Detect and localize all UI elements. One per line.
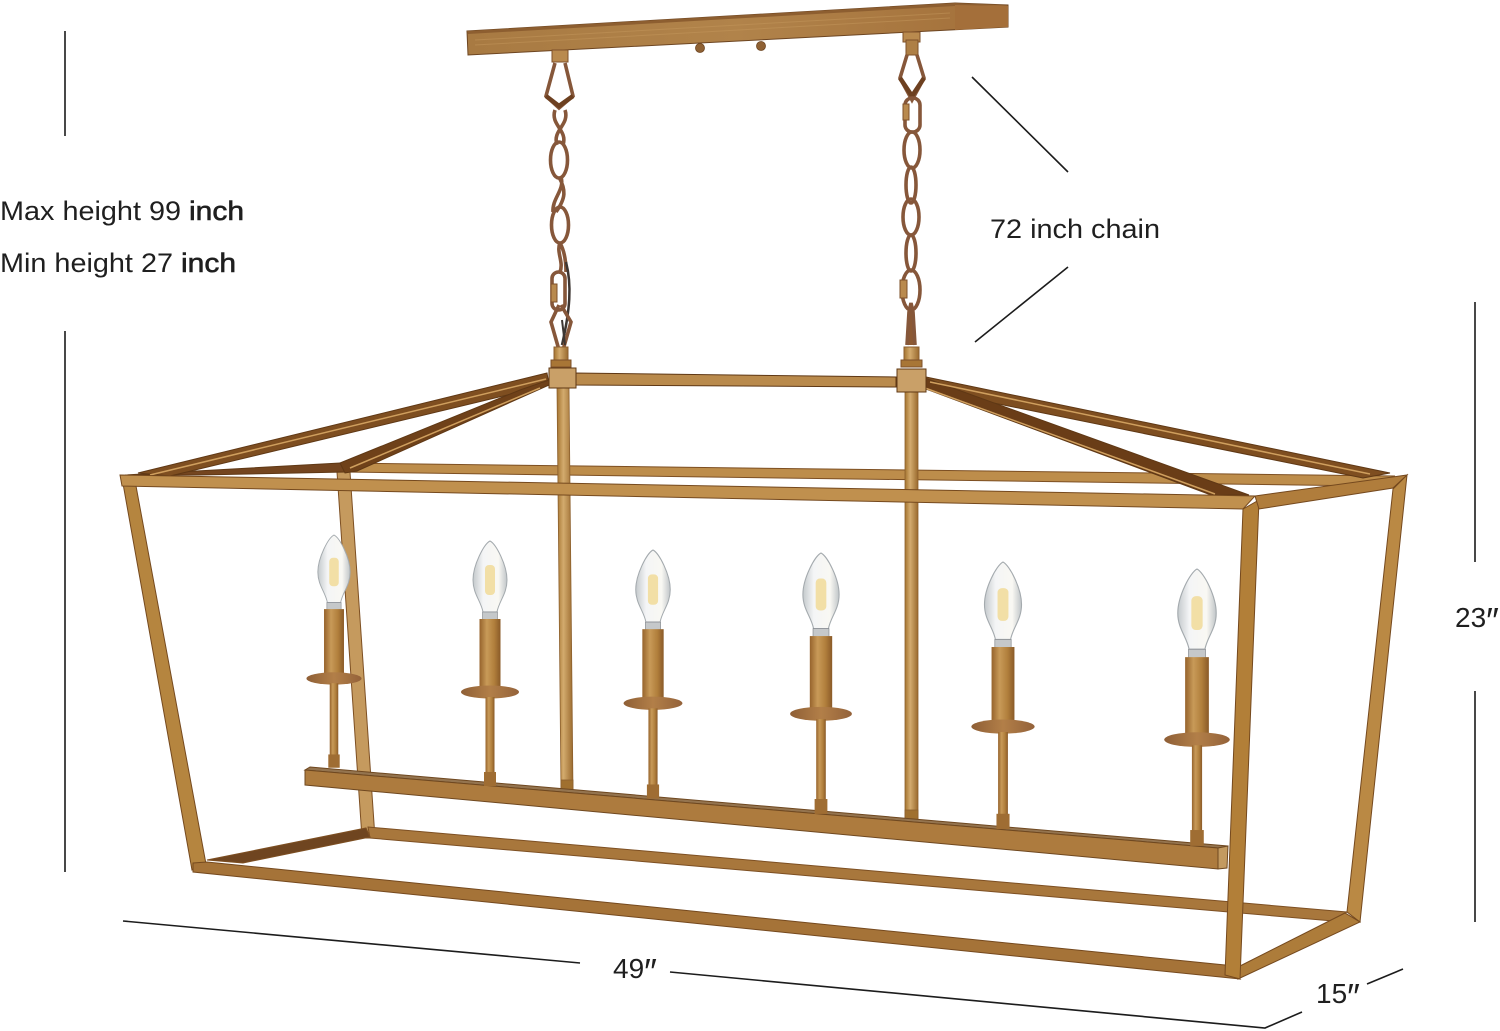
near left post bbox=[122, 478, 206, 870]
front top bar bbox=[120, 475, 1255, 509]
fixture length label: ″ bbox=[644, 951, 657, 992]
max height text: inch bbox=[189, 196, 244, 226]
candle bulb 2 bbox=[461, 541, 519, 786]
back top bar bbox=[340, 463, 1395, 486]
fixture length label: 49 bbox=[613, 953, 644, 984]
fixture height label: ″ bbox=[1486, 600, 1499, 641]
left hub bbox=[549, 368, 576, 388]
right short rafter bbox=[918, 378, 1249, 495]
left long rafter bbox=[138, 373, 549, 476]
far right post bbox=[1347, 475, 1407, 922]
right top side bar bbox=[1255, 475, 1407, 509]
candle bulb 4 bbox=[790, 553, 852, 814]
hub connecting bar bbox=[574, 373, 896, 387]
lantern roof bbox=[125, 368, 1390, 495]
back bottom bar bbox=[368, 827, 1347, 921]
left bottom side bar bbox=[207, 828, 370, 863]
canopy knobs bbox=[696, 42, 766, 52]
right hub bbox=[897, 369, 926, 392]
left short rafter bbox=[340, 380, 549, 473]
candle bulb 1 bbox=[306, 535, 362, 768]
lantern back frame bbox=[207, 463, 1395, 921]
candle bulb 3 bbox=[624, 550, 682, 799]
far left post bbox=[337, 472, 375, 838]
max height text: Max height 99 bbox=[0, 196, 181, 226]
fixture height label: 23 bbox=[1455, 602, 1486, 633]
front bottom bar bbox=[193, 862, 1240, 979]
right long rafter bbox=[920, 377, 1390, 478]
min height text: inch bbox=[181, 248, 236, 278]
center support rods bbox=[557, 388, 918, 822]
min height text bbox=[0, 248, 236, 278]
candle arm bar bbox=[305, 767, 1228, 869]
lantern front frame bbox=[120, 475, 1407, 979]
right bottom side bar bbox=[1238, 913, 1360, 979]
left chain bbox=[546, 50, 573, 368]
right chain bbox=[900, 32, 924, 367]
left side top bar bbox=[125, 463, 345, 475]
chain length label: 72 inch chain bbox=[990, 214, 1160, 244]
candle bulb 6 bbox=[1164, 569, 1230, 846]
candle bulb 5 bbox=[971, 562, 1035, 829]
min height text: Min height 27 bbox=[0, 248, 173, 278]
fixture width label: ″ bbox=[1347, 976, 1360, 1017]
fixture width label: 15 bbox=[1316, 978, 1347, 1009]
max height text bbox=[0, 196, 244, 226]
near right post bbox=[1225, 500, 1259, 979]
ceiling canopy bbox=[467, 3, 1008, 55]
